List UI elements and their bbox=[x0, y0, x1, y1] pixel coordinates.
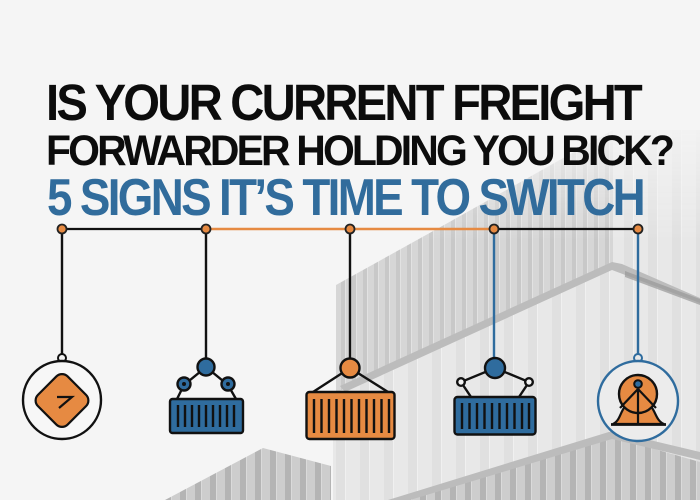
connector rail bbox=[58, 224, 642, 360]
icon: orange container with rigging bbox=[306, 358, 394, 439]
title line 2: FORWARDER HOLDING YOU BICK? bbox=[46, 127, 673, 175]
icon: diamond in circle bbox=[23, 354, 101, 439]
icon: person and wheel in circle bbox=[598, 354, 678, 441]
icon: blue container with rigging bbox=[170, 358, 243, 433]
title bbox=[46, 74, 673, 227]
title line 1: IS YOUR CURRENT FREIGHT bbox=[46, 74, 643, 131]
background: stacked shipping containers bbox=[165, 130, 700, 500]
icon: blue container with hooks bbox=[454, 358, 536, 434]
